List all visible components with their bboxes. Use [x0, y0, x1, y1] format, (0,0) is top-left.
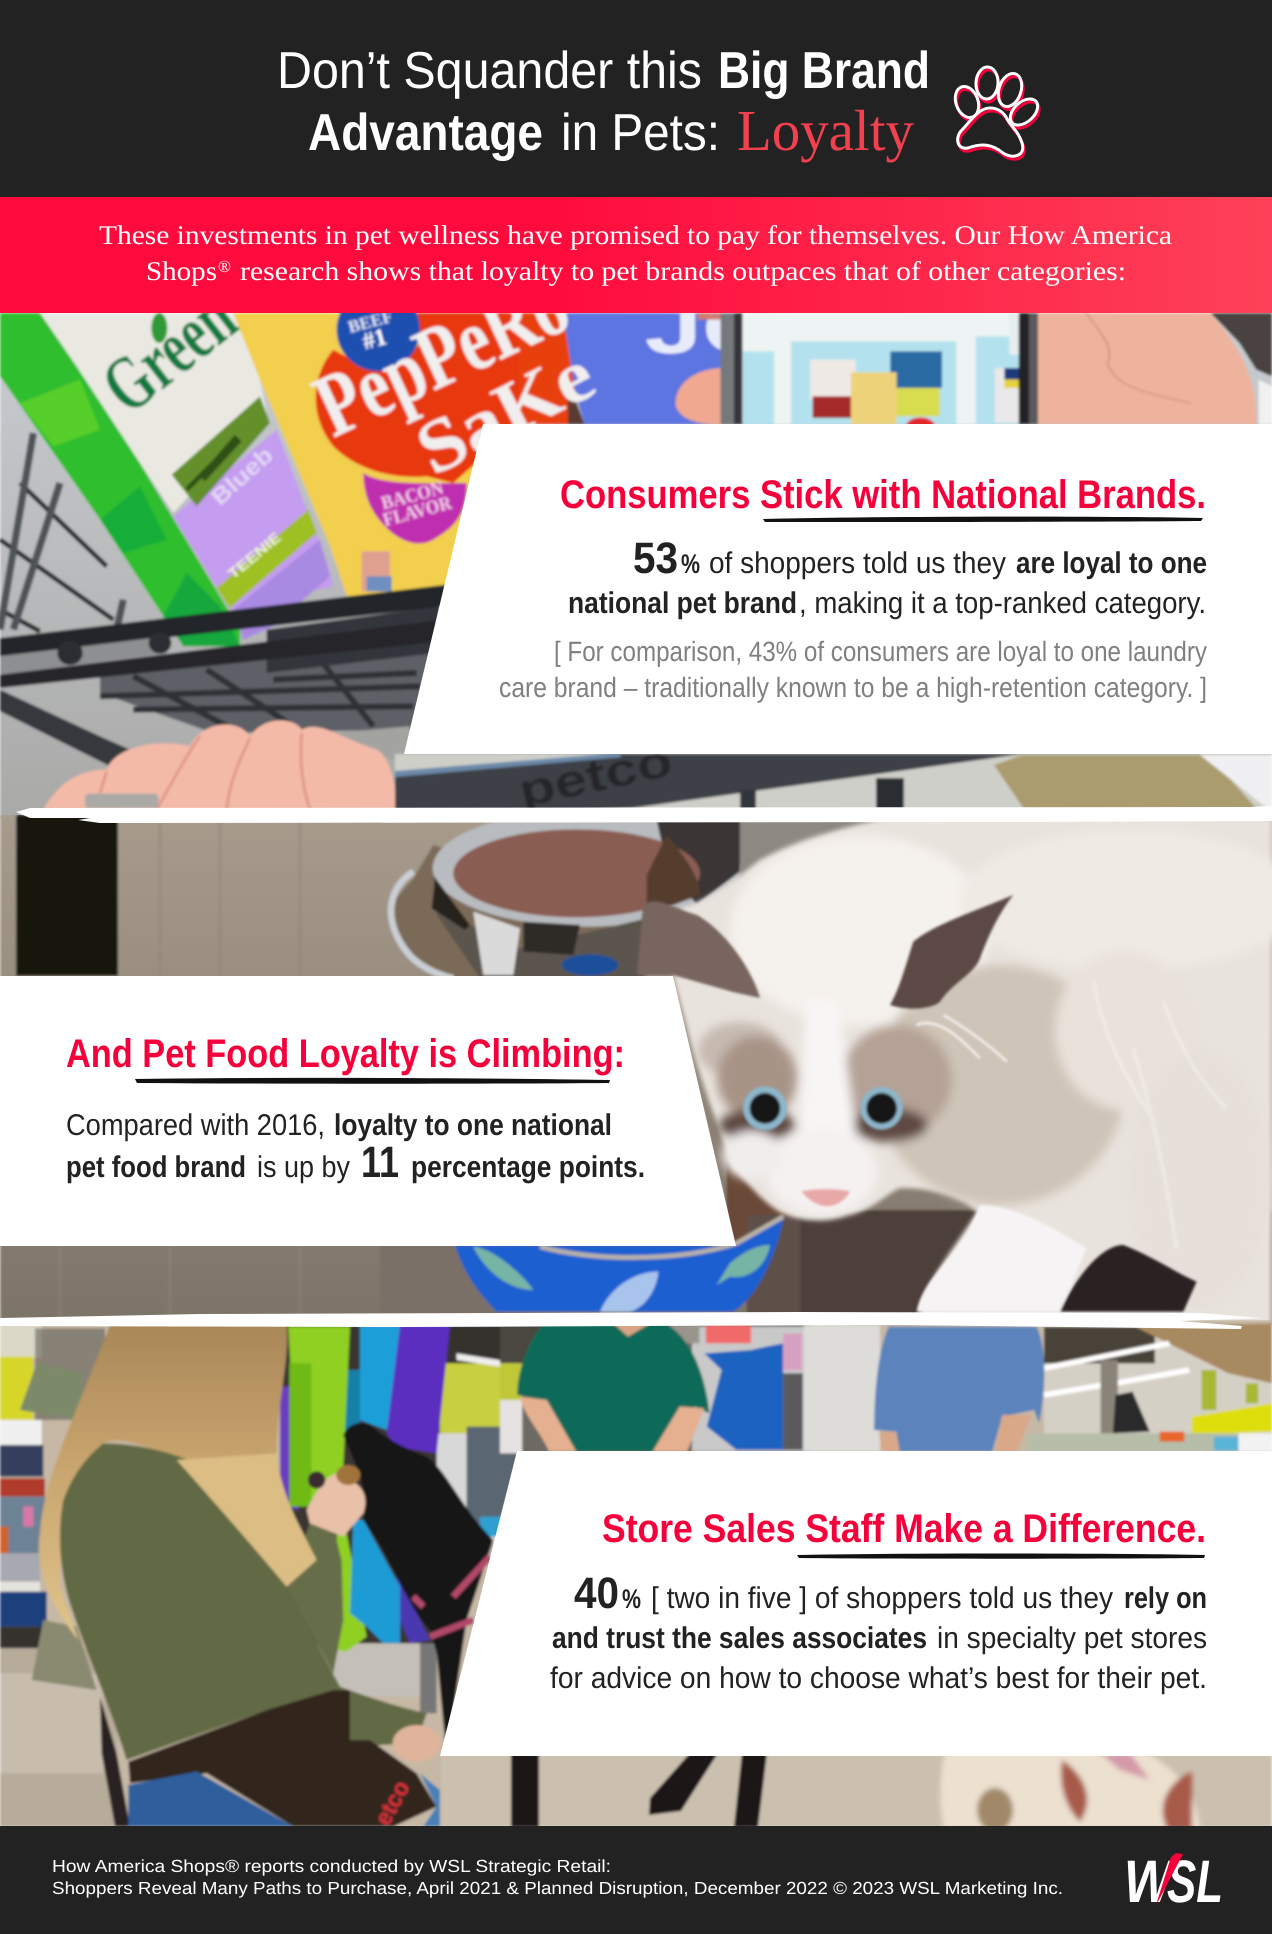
icon: paw print — [951, 66, 1044, 159]
stat: 40% rely on associates: [ two in five ] of shoppers told us they — [651, 1582, 1113, 1615]
comparison note — [499, 636, 1207, 703]
header band — [0, 0, 1272, 197]
photo: pet treats in shopping cart: TEENIE — [225, 529, 284, 582]
photo: pet treats in shopping cart: Blueb — [206, 442, 278, 510]
intro text: These investments in pet wellness have promised to pay for themselves. Our How America — [99, 220, 1172, 250]
title — [277, 42, 930, 163]
intro text: research shows that loyalty to pet brands outpaces that of other categories: — [240, 256, 1126, 286]
photo: pet treats in shopping cart: Green — [85, 273, 252, 430]
stat: 53% loyal — [568, 534, 1207, 620]
stat: up 11 points: loyalty to one national — [334, 1109, 612, 1142]
intro text — [99, 220, 1172, 286]
stat: 53% loyal: are loyal to one — [1016, 547, 1207, 580]
logo: WSL: SL — [1167, 1848, 1223, 1915]
title: in Pets: — [561, 104, 720, 162]
heading: pet food loyalty: And Pet Food Loyalty is Climbing: — [66, 1032, 625, 1076]
logo: WSL: W — [1124, 1848, 1176, 1915]
stat: up 11 points: 11 — [361, 1138, 399, 1187]
torn paper divider: lower — [0, 1312, 1262, 1329]
stat: 53% loyal: of shoppers told us they — [709, 547, 1006, 580]
intro text: ® — [218, 257, 231, 276]
photo: pet treats in shopping cart — [0, 313, 1272, 818]
photo: pet treats in shopping cart: FLAVOR — [380, 491, 454, 530]
stat: 40% rely on associates: % — [622, 1584, 641, 1614]
heading underline — [797, 1554, 1205, 1559]
stat: 40% rely on associates: for advice on how to choose what’s best for their pet. — [550, 1662, 1207, 1695]
title: Advantage — [308, 104, 543, 162]
photo: pet treats in shopping cart: BEEF — [346, 307, 395, 337]
stat: 53% loyal: national pet brand — [568, 587, 797, 620]
intro text: Shops — [146, 256, 217, 286]
title: Loyalty — [737, 98, 914, 163]
stat: up 11 points: is up by — [257, 1151, 350, 1184]
stat: up 11 points: pet food brand — [66, 1151, 246, 1184]
photo: pet treats in shopping cart: PepPeRo — [299, 253, 583, 456]
heading: sales staff: Store Sales Staff Make a Difference. — [602, 1507, 1206, 1551]
stat: 53% loyal: % — [681, 549, 700, 579]
stat: 40% rely on associates: 40 — [574, 1569, 619, 1618]
stat: 40% rely on associates: in specialty pet stores — [937, 1622, 1207, 1655]
intro band — [0, 197, 1272, 313]
stat: up 11 points: percentage points. — [411, 1151, 645, 1184]
stat: 40% rely on associates: rely on — [1124, 1582, 1207, 1615]
panel: store sales staff — [440, 1451, 1272, 1756]
photo: pet treats in shopping cart: JC — [645, 288, 777, 368]
logo: WSL — [1124, 1848, 1223, 1915]
heading underline — [763, 517, 1203, 522]
photo: pet treats in shopping cart: petco — [514, 734, 677, 817]
stat: 40% rely on associates — [550, 1569, 1207, 1695]
stat: up 11 points — [66, 1109, 645, 1187]
source note: Shoppers Reveal Many Paths to Purchase, April 2021 & Planned Disruption, December 2022 © 2023 WSL Marketing Inc. — [52, 1878, 1063, 1898]
photo: pet treats in shopping cart: BACON — [379, 477, 446, 514]
heading underline — [135, 1078, 610, 1084]
photo: pet treats in shopping cart: SaKe — [403, 332, 607, 491]
title: Big Brand — [718, 42, 930, 100]
title: Don’t Squander this — [277, 42, 702, 100]
panel: national brands — [404, 424, 1272, 754]
source note: How America Shops® reports conducted by WSL Strategic Retail: — [52, 1856, 611, 1876]
photo: pet treats in shopping cart: #1 — [359, 323, 390, 355]
photo: woman feeding dog in pet store: etco — [369, 1776, 415, 1830]
photo: kitten eating from bowls — [0, 810, 1272, 1325]
stat: 40% rely on associates: and trust the sales associates — [552, 1622, 927, 1655]
panel: pet food loyalty — [0, 976, 736, 1246]
stat: 53% loyal: , making it a top-ranked category. — [799, 587, 1206, 620]
stat: up 11 points: Compared with 2016, — [66, 1109, 325, 1142]
torn paper divider: upper — [16, 806, 1272, 823]
photo: woman feeding dog in pet store — [0, 1320, 1272, 1832]
stat: 53% loyal: 53 — [633, 534, 678, 583]
source note — [52, 1856, 1063, 1898]
footer band — [0, 1826, 1272, 1934]
